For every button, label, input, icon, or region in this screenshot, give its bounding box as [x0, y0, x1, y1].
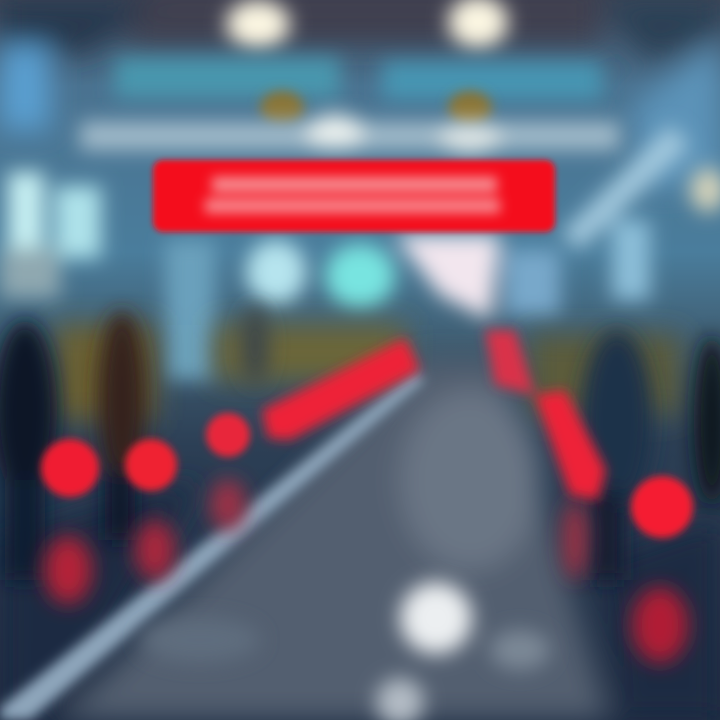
- olive wall band: [55, 325, 680, 420]
- red floor strip right: [485, 330, 606, 500]
- floor light line: [0, 372, 425, 720]
- floor highlights: [140, 582, 550, 720]
- red banner: [153, 160, 555, 232]
- banner blurred lettering: [205, 177, 500, 213]
- ceiling lights: [226, 0, 508, 48]
- side windows and beams: [0, 125, 720, 300]
- red circles: [41, 413, 693, 538]
- red floor strip left: [262, 338, 420, 440]
- mid-level windows: [165, 235, 560, 380]
- overhead teal signs: [115, 58, 602, 100]
- red reflections: [44, 479, 688, 663]
- gold lamps: [260, 91, 492, 125]
- floor: [0, 360, 720, 720]
- dark figures: [0, 305, 720, 580]
- pale overhead band: [80, 114, 620, 154]
- ceiling: [0, 0, 720, 190]
